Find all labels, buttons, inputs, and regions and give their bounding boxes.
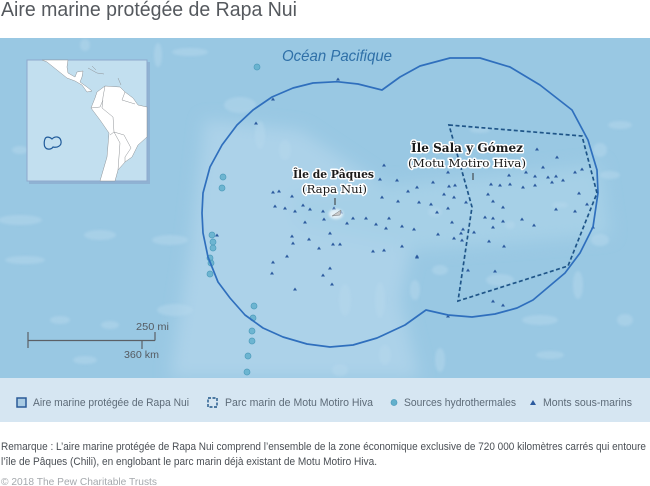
label: Île de Pâques: Île de Pâques: [293, 167, 374, 181]
note text: l’île de Pâques (Chili), en englobant le parc marin déjà existant de Motu Motiro Hiva.: [1, 456, 377, 468]
Motu Motiro Hiva marine park boundary: [449, 125, 597, 301]
seamounts: [215, 78, 595, 318]
scale bar: 250 mi: [136, 321, 169, 333]
ocean label: Océan Pacifique: [282, 48, 392, 65]
legend: seamounts: Monts sous-marins: [543, 397, 632, 409]
Rapa Nui marine protected area boundary: [202, 58, 598, 347]
island tick marks: [335, 173, 473, 205]
hydrothermal vents: [207, 64, 260, 375]
scale bar: [28, 321, 169, 361]
island: Rapa Nui: [329, 209, 343, 219]
scale bar: 360 km: [124, 349, 159, 361]
legend: protected area: Aire marine protégée de Rapa Nui: [33, 397, 189, 409]
label: Île Sala y Gómez: (Motu Motiro Hiva): [408, 156, 526, 170]
legend: hydrothermal vents: Sources hydrothermales: [404, 397, 516, 409]
label: Île Sala y Gómez: Île Sala y Gómez: [411, 140, 523, 155]
legend: [17, 397, 632, 409]
panel: ocean map background: [0, 38, 650, 422]
inset: Rapa Nui boundary ring: [44, 137, 61, 149]
note text: [1, 441, 646, 468]
legend: marine park: Parc marin de Motu Motiro Hiva: [225, 397, 374, 409]
inset: landmass: [42, 60, 147, 181]
label: Île de Pâques: (Rapa Nui): [302, 182, 367, 196]
label: Île de Pâques: [293, 167, 374, 196]
inset locator map: [27, 60, 150, 184]
label: Île Sala y Gómez: [408, 140, 526, 170]
legend band: [0, 378, 650, 422]
